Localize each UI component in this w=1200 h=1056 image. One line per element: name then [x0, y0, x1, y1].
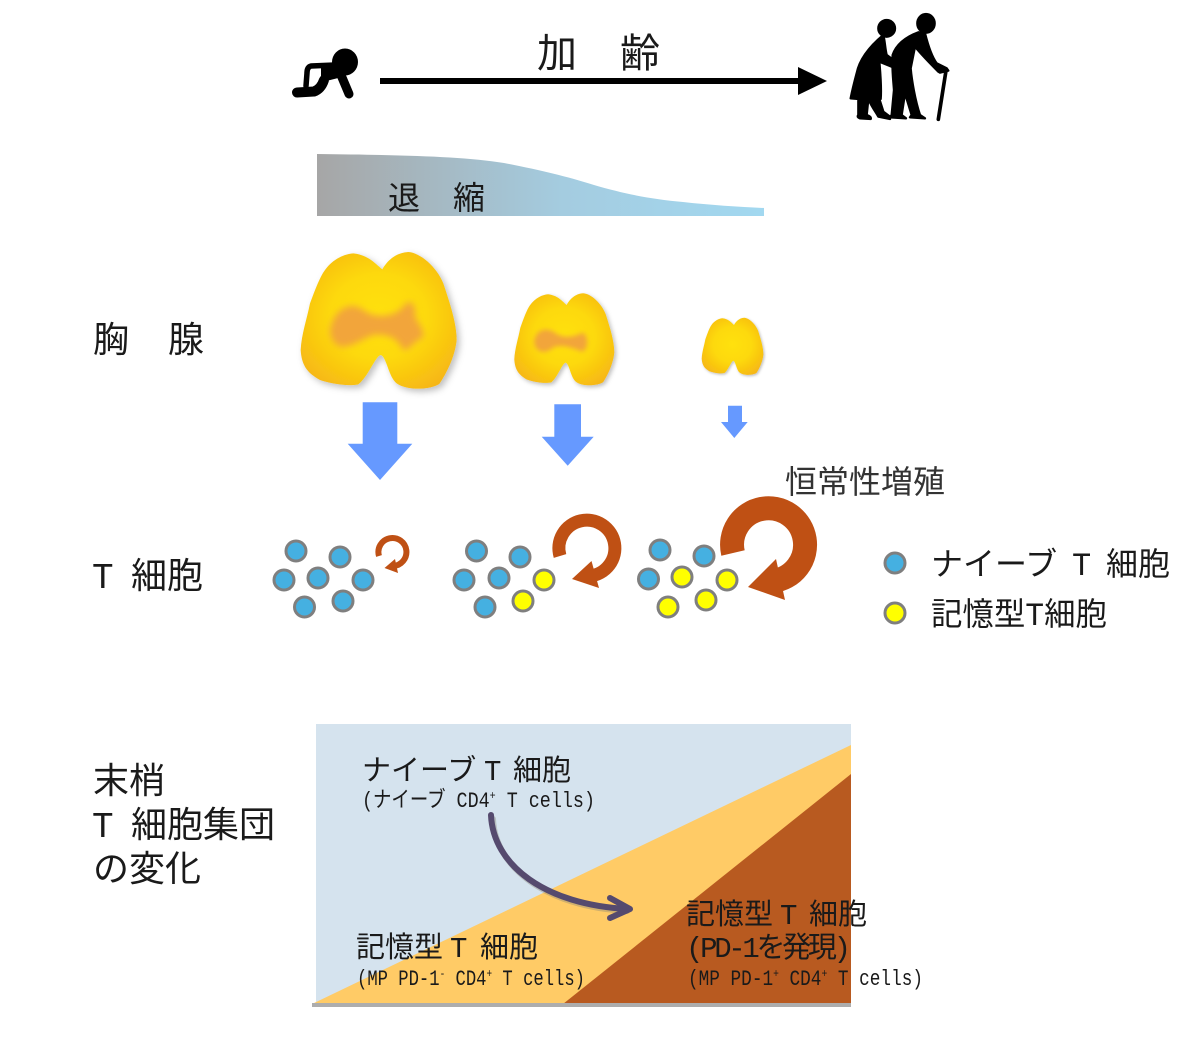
- label: memory T cell expressing PD-1: (PD-1を発現): [686, 931, 851, 966]
- cell cluster: middle age: [454, 541, 554, 617]
- label: memory T cell expressing PD-1: 記憶型: [686, 898, 773, 931]
- label: MP PD-1 positive cells: +: [773, 967, 779, 981]
- label: memory T cell: 記憶型: [356, 931, 443, 964]
- cell cluster: young: [274, 541, 373, 617]
- label: MP PD-1 negative cells: +: [486, 967, 492, 981]
- arrow: large T cell output: [348, 402, 412, 480]
- icon: elderly couple: [851, 14, 948, 119]
- label: homeostatic proliferation: 恒常性増殖: [785, 464, 945, 500]
- label: involution: 縮: [453, 180, 485, 216]
- legend: naive T cell: T: [1072, 548, 1091, 585]
- legend: memory T cell: 記憶型T細胞: [931, 596, 1107, 635]
- cell cluster: old age: [638, 540, 737, 617]
- label: naive T cell: T: [484, 756, 501, 789]
- label: memory T cell expressing PD-1: T: [780, 900, 797, 933]
- arrow: large homeostatic cycle: [732, 508, 805, 600]
- arrow: small T cell output: [721, 406, 748, 438]
- label: peripheral T cell population change: 末梢: [93, 760, 165, 801]
- label: memory T cell: 細胞: [480, 931, 538, 964]
- chart: thymic involution wedge: [317, 154, 764, 216]
- label: T cells: 細胞: [131, 555, 203, 596]
- label: peripheral T cell population change: 細胞集団: [131, 804, 275, 845]
- icon: small thymus: [702, 318, 763, 375]
- icon: medium thymus: [514, 293, 614, 385]
- label: memory T cell expressing PD-1: 細胞: [809, 898, 867, 931]
- label: peripheral T cell population change: の変化: [93, 848, 201, 889]
- arrow: small homeostatic cycle: [378, 538, 406, 573]
- label: MP PD-1 negative cells: T cells): [492, 967, 585, 992]
- heading: aging: 加: [537, 32, 577, 76]
- chart: T cell composition: [312, 724, 923, 1007]
- label: peripheral T cell population change: T: [92, 807, 114, 848]
- chart background: naive area: [316, 724, 851, 1004]
- icon: crawling baby: [297, 48, 358, 94]
- chart band: memory T cells: [312, 745, 851, 1004]
- label: naive T cell: ナイーブ: [362, 754, 476, 787]
- heading: aging: 齢: [620, 32, 660, 76]
- label: MP PD-1 positive cells: (MP PD-1: [688, 967, 794, 992]
- arrow: naive to memory: [491, 815, 630, 918]
- legend: naive T cell: 細胞: [1106, 546, 1170, 582]
- label: naive CD4 T cells: (ナイーブ CD4: [362, 789, 515, 814]
- arrow: aging timeline: [380, 67, 827, 95]
- label: thymus: 胸: [93, 319, 129, 360]
- label: MP PD-1 positive cells: +: [821, 967, 827, 981]
- label: involution: 退: [388, 180, 420, 216]
- icon: large thymus: [301, 252, 457, 389]
- label: MP PD-1 positive cells: T cells): [827, 967, 923, 992]
- label: naive CD4 T cells: +: [490, 789, 496, 803]
- arrow: medium homeostatic cycle: [559, 520, 615, 588]
- label: naive T cell: 細胞: [513, 754, 571, 787]
- label: memory T cell: T: [450, 933, 467, 966]
- label: MP PD-1 negative cells: CD4: [445, 967, 486, 992]
- label: MP PD-1 negative cells: (MP PD-1: [357, 967, 463, 992]
- legend: naive T cell: ナイーブ: [931, 546, 1057, 582]
- label: T cells: T: [92, 558, 114, 599]
- label: MP PD-1 positive cells: CD4: [779, 967, 821, 992]
- legend: naive T cell: [885, 546, 1170, 585]
- label: thymus: 腺: [168, 319, 204, 360]
- label: naive CD4 T cells: T cells): [496, 789, 595, 814]
- chart band: PD-1 memory T cells: [563, 774, 851, 1004]
- arrow: medium T cell output: [542, 404, 594, 466]
- label: MP PD-1 negative cells: -: [440, 967, 445, 981]
